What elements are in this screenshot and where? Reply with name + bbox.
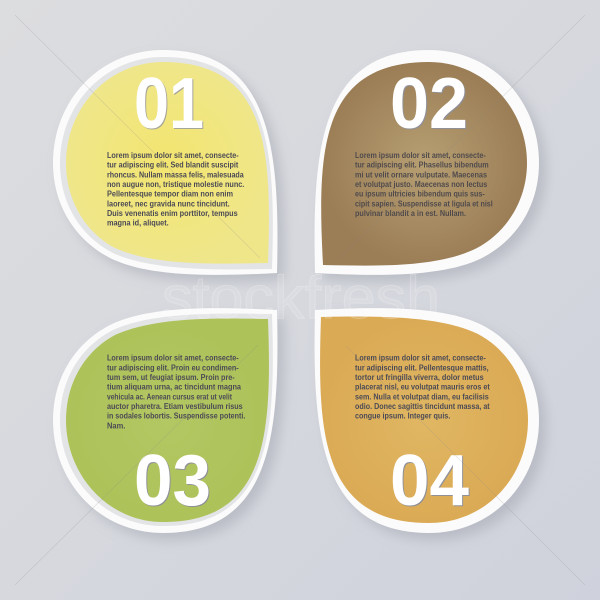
text block 4 [355,353,490,421]
watermark: stockfresh [162,264,440,331]
text block 1: Duis venenatis enim porttitor, tempus [107,208,238,218]
text block 2: cipit sapien. Suspendisse at ligula et nisl [355,198,493,208]
text block 4: tur adipiscing elit. Pellentesque mattis, [355,362,489,372]
number 01: 01 [135,65,205,145]
text block 3: in sodales lobortis. Suspendisse potenti. [107,411,245,421]
text block 2: pulvinar blandit a in est. Nullam. [355,208,466,218]
text block 4: tortor ut fringilla viverra, dolor metus [355,372,484,382]
text block 3: tium aliquam urna, ac tincidunt magna [107,382,241,392]
text block 3: Nam. [107,420,125,430]
text block 1: magna id, aliquet. [107,218,169,228]
text block 3: auctor pharetra. Etiam vestibulum risus [107,401,243,411]
text block 3: vehicula ac. Aenean cursus erat ut velit [107,391,232,401]
card 2: brown drop [315,50,546,282]
text block 1: laoreet, nec gravida nunc tincidunt. [107,198,230,208]
number 04: 04 [391,442,470,522]
text block 3: tum sem, ut feugiat ipsum. Proin pre- [107,372,235,382]
number 02: 02 [391,65,469,145]
number 03: 03 [135,442,212,522]
text block 2: tur adipiscing elit. Phasellus bibendum [355,160,489,170]
text block 2: et volutpat justo. Maecenas non lectus [355,179,487,189]
text block 1 [107,150,244,228]
number 01: 01 [134,64,204,144]
text block 4: sem. Nulla et volutpat diam, eu facilisis [355,391,489,401]
number 03: 03 [134,441,211,521]
text block 1: rhoncus. Nullam massa felis, malesuada [107,169,244,179]
text block 2: eu ipsum ultricies bibendum quis sus- [355,189,485,199]
text block 1: Lorem ipsum dolor sit amet, consecte- [107,150,239,160]
text block 1: tur adipiscing elit. Sed blandit suscipit [107,160,238,170]
text block 2: mi ut velit ornare vulputate. Maecenas [355,169,487,179]
text block 1: Pellentesque tempor diam non enim [107,189,233,199]
number 02: 02 [390,64,468,144]
card 1: yellow drop [53,50,284,282]
number 04: 04 [390,441,469,521]
text block 4: placerat nisl, eu volutpat mauris eros et [355,382,490,392]
card 4: orange drop [315,308,546,540]
text block 1: non augue non, tristique molestie nunc. [107,179,244,189]
text block 3: Lorem ipsum dolor sit amet, consecte- [107,353,239,363]
text block 2: Lorem ipsum dolor sit amet, consecte- [355,150,486,160]
text block 3 [107,353,245,430]
text block 2 [355,150,493,218]
text block 4: odio. Donec sagittis tincidunt massa, at [355,401,490,411]
text block 4: congue ipsum. Integer quis. [355,411,450,421]
card 3: green drop [53,308,284,540]
text block 3: tur adipiscing elit. Proin eu condimen- [107,362,239,372]
text block 4: Lorem ipsum dolor sit amet, consecte- [355,353,486,363]
